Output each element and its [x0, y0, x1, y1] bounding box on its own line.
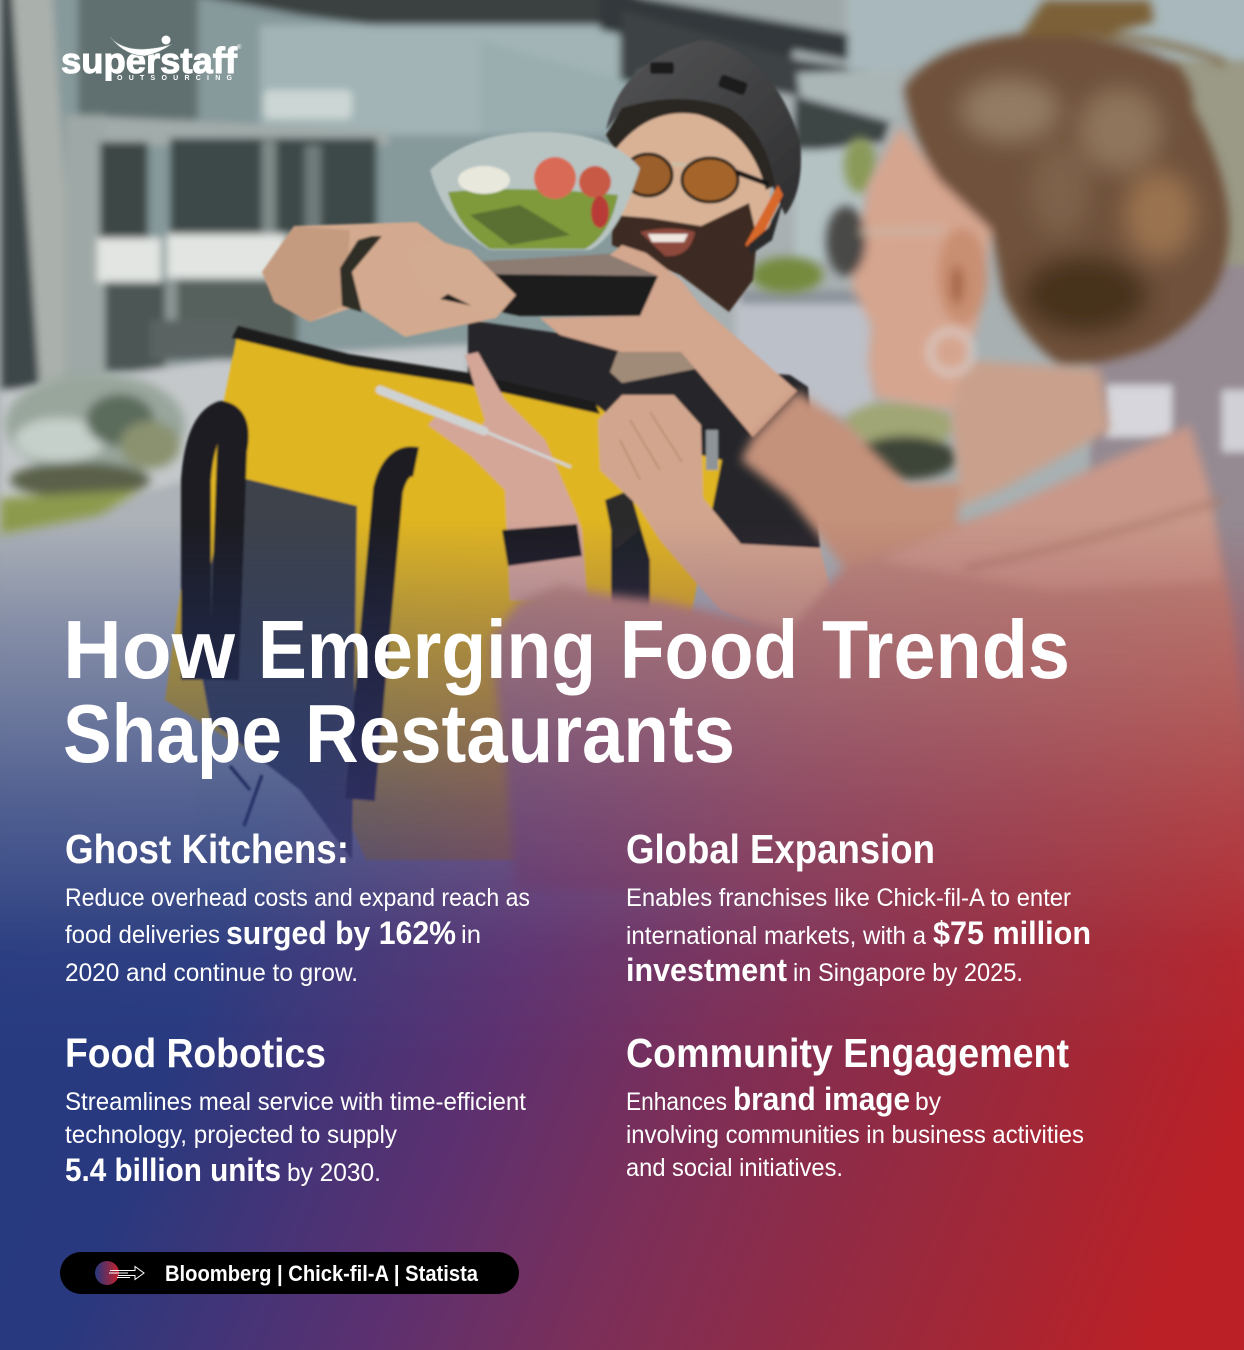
text block: global expansion: Enables franchises like Chick-fil-A to enter — [626, 884, 1071, 912]
sunglasses — [624, 154, 768, 202]
heading: global expansion: Global Expansion — [626, 826, 935, 872]
text block: food robotics: technology, projected to supply — [65, 1121, 397, 1149]
text block: community engagement: and social initiatives. — [626, 1154, 843, 1182]
text block: community engagement: involving communities in business activities — [626, 1121, 1084, 1149]
sources pill: Bloomberg | Chick-fil-A | Statista — [165, 1261, 479, 1286]
text block: food robotics: by 2030. — [287, 1159, 381, 1187]
logo: superstaff outsourcing: ® — [237, 44, 242, 51]
yellow delivery bag — [165, 330, 722, 860]
panel: community engagement — [626, 1030, 1084, 1182]
text block: community engagement: Enhances — [626, 1088, 727, 1116]
bag front pocket — [195, 475, 357, 860]
logo: superstaff outsourcing: OUTSOURCING — [117, 75, 233, 82]
text block: global expansion: international markets, with a — [626, 922, 926, 950]
bushes — [0, 137, 957, 535]
title — [63, 603, 1070, 780]
heading: ghost kitchens: Ghost Kitchens: — [65, 826, 349, 872]
rider neck — [610, 340, 700, 383]
rider head — [610, 90, 770, 280]
text block: community engagement: by — [915, 1088, 941, 1116]
hair — [904, 34, 1229, 365]
panel: food robotics — [65, 1030, 526, 1188]
rider forearm and hand — [262, 222, 516, 337]
text block: community engagement: brand image — [733, 1081, 910, 1117]
text block: food robotics: Streamlines meal service with time-efficient — [65, 1088, 526, 1116]
heading: community engagement: Community Engagement — [626, 1030, 1069, 1076]
torso and sleeve — [490, 425, 1244, 1000]
text block: ghost kitchens: surged by 162% — [226, 915, 456, 951]
heading: food robotics: Food Robotics — [65, 1030, 326, 1076]
text block: ghost kitchens: in — [461, 921, 481, 949]
customer hand under tray — [540, 245, 797, 437]
text block: global expansion: $75 million — [933, 915, 1091, 951]
bag straps — [196, 416, 416, 800]
icon: gradient circle with arrow — [95, 1261, 144, 1285]
text block: food robotics: 5.4 billion units — [65, 1152, 281, 1188]
text block: community engagement — [626, 1081, 1084, 1182]
salad bowl — [430, 132, 640, 250]
helmet strap — [745, 185, 783, 250]
hair bun — [1020, 0, 1154, 36]
text block: ghost kitchens: food deliveries — [65, 921, 220, 949]
face — [852, 126, 991, 410]
phone hand, forearm — [428, 352, 587, 600]
rider hand on strap and forearm — [598, 395, 840, 640]
title: Shape — [63, 687, 282, 780]
fingers over tray — [405, 240, 516, 318]
neck — [951, 360, 1110, 506]
title: Food — [620, 603, 798, 696]
title: How — [63, 603, 235, 696]
helmet — [606, 40, 801, 215]
title: Trends — [822, 603, 1070, 696]
title: Restaurants — [305, 687, 735, 780]
gradient overlay — [0, 520, 1244, 1350]
customer figure — [490, 0, 1244, 1000]
text block: global expansion: in Singapore by 2025. — [793, 959, 1023, 987]
salad tray — [440, 266, 658, 316]
earring — [930, 331, 972, 373]
text block: global expansion: investment — [626, 952, 787, 988]
title: Emerging — [258, 603, 596, 696]
sources pill — [60, 1252, 519, 1294]
text block: ghost kitchens: 2020 and continue to grow. — [65, 959, 358, 987]
rider shirt — [468, 320, 820, 600]
text block: global expansion — [626, 884, 1091, 988]
panel: ghost kitchens — [65, 826, 530, 987]
text block: ghost kitchens — [65, 884, 530, 987]
glasses — [826, 206, 866, 276]
ear — [937, 228, 987, 324]
panel: global expansion — [626, 826, 1091, 988]
logo: superstaff outsourcing: superstaff — [61, 40, 238, 81]
hair highlights — [960, 78, 1196, 333]
text block: ghost kitchens: Reduce overhead costs and expand reach as — [65, 884, 530, 912]
beard — [612, 203, 757, 312]
text block: food robotics — [65, 1088, 526, 1188]
rider and bag — [165, 40, 840, 860]
